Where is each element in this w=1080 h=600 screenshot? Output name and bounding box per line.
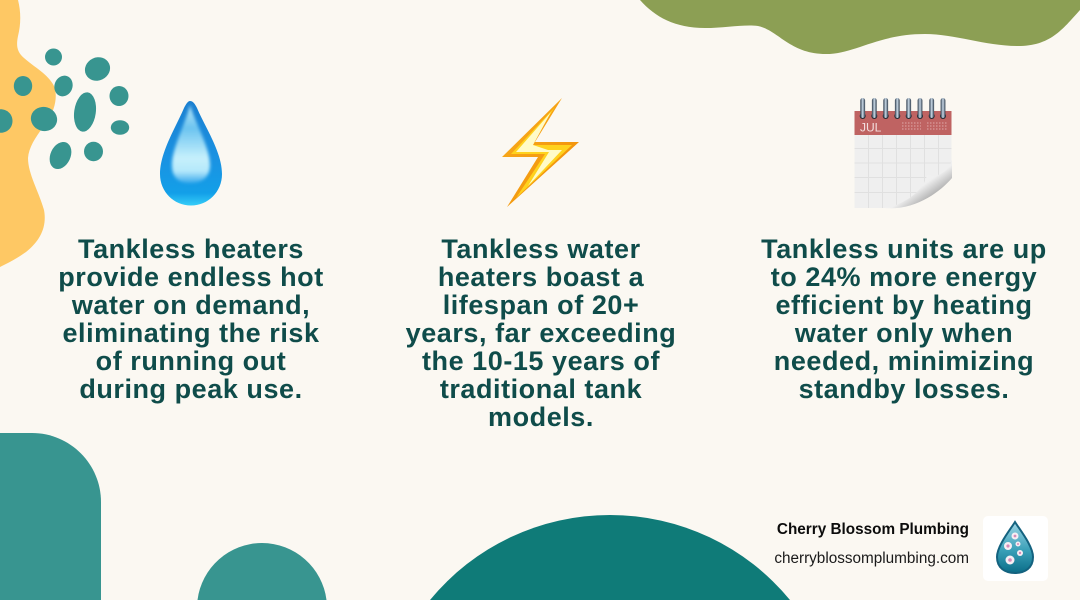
teal arch bottom left [0,433,101,600]
teal dome bottom [198,543,326,600]
icon: water drop [160,101,222,206]
text: endless hot water [58,234,324,404]
text: energy efficiency: needed, minimizing [774,346,1034,376]
text: energy efficiency: to 24% more energy [771,262,1037,292]
brand url: cherryblossomplumbing.com [774,550,969,567]
text: lifespan: lifespan of 20+ [443,290,639,320]
icon: lightning bolt [502,98,579,207]
dark teal dome bottom [430,515,790,600]
text: energy efficiency: water only when [795,318,1013,348]
teal dots cluster [0,48,129,173]
text: lifespan: heaters boast a [438,262,644,292]
text: lifespan: models. [488,402,594,432]
text: endless hot water: of running out [96,346,286,376]
brand name: Cherry Blossom Plumbing [777,521,969,538]
text: energy efficiency [761,234,1047,404]
text: lifespan: years, far exceeding [406,318,676,348]
text: endless hot water: during peak use. [79,374,303,404]
text: endless hot water: eliminating the risk [62,318,320,348]
logo background [983,516,1048,581]
text: lifespan: Tankless water [441,234,641,264]
text: endless hot water: provide endless hot [58,262,324,292]
text: endless hot water: water on demand, [72,290,310,320]
text: lifespan: the 10-15 years of [422,346,660,376]
green blob [640,0,1080,54]
yellow blob [0,0,56,267]
text: energy efficiency: Tankless units are up [761,234,1047,264]
logo: drop with blossoms [997,522,1033,573]
text: endless hot water: Tankless heaters [78,234,304,264]
text: energy efficiency: standby losses. [799,374,1009,404]
icon: calendar: JUL [860,120,882,134]
text: lifespan [406,234,676,432]
icon: calendar [854,98,952,208]
text: lifespan: traditional tank [440,374,642,404]
text: energy efficiency: efficient by heating [775,290,1033,320]
